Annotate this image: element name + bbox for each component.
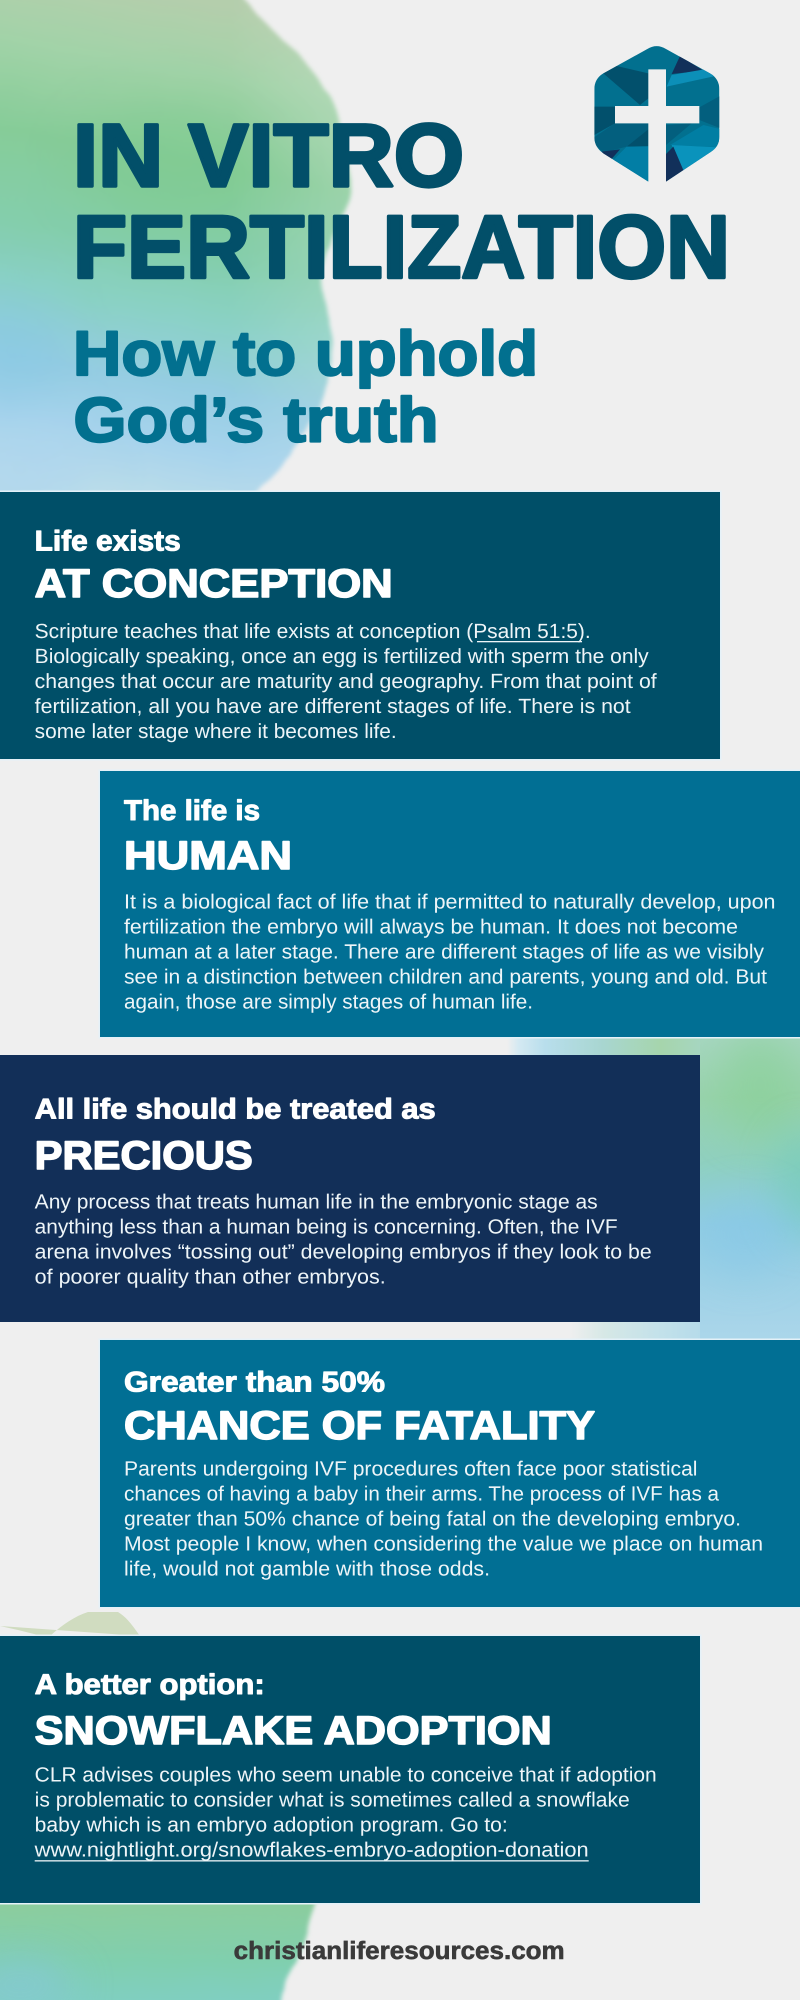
body text: see in a distinction between children and parents, young and old. But <box>124 966 767 989</box>
title <box>73 105 730 296</box>
heading: AT CONCEPTION <box>35 562 393 606</box>
body text <box>34 1764 657 1862</box>
watercolor wash: right middle <box>507 1030 800 1340</box>
body text: CLR advises couples who seem unable to conceive that if adoption <box>35 1764 657 1787</box>
body text: Parents undergoing IVF procedures often face poor statistical <box>124 1458 698 1481</box>
kicker: A better option: <box>35 1669 265 1701</box>
heading: CHANCE OF FATALITY <box>124 1404 595 1448</box>
watercolor wash: bottom left <box>0 1890 318 2000</box>
panel: human <box>100 771 800 1037</box>
panel: chance of fatality <box>100 1340 800 1607</box>
body text: is problematic to consider what is sometimes called a snowflake <box>35 1789 630 1812</box>
subtitle: God’s truth <box>74 386 439 456</box>
body text: changes that occur are maturity and geography. From that point of <box>35 670 657 693</box>
panel: snowflake adoption <box>0 1636 700 1903</box>
body text <box>35 620 657 743</box>
panel: precious <box>0 1055 700 1322</box>
body text: Biologically speaking, once an egg is fertilized with sperm the only <box>35 645 649 668</box>
heading: PRECIOUS <box>35 1134 253 1178</box>
subtitle <box>73 319 538 456</box>
heading: HUMAN <box>124 834 292 878</box>
body text <box>35 1191 652 1289</box>
title: IN VITRO <box>73 105 464 205</box>
body text: life, would not gamble with those odds. <box>124 1558 490 1581</box>
body text: www.nightlight.org/snowflakes-embryo-adoption-donation <box>34 1839 589 1862</box>
title: FERTILIZATION <box>73 196 730 296</box>
subtitle: How to uphold <box>73 319 538 389</box>
footer website: christianliferesources.com <box>234 1937 565 1965</box>
body text <box>124 1458 763 1581</box>
body text: anything less than a human being is concerning. Often, the IVF <box>35 1216 618 1239</box>
body text: some later stage where it becomes life. <box>35 720 397 743</box>
body text: Scripture teaches that life exists at conception (Psalm 51:5). <box>35 620 591 643</box>
body text: again, those are simply stages of human life. <box>124 991 533 1014</box>
panel: at conception <box>0 492 720 759</box>
kicker: The life is <box>124 795 260 827</box>
body text: greater than 50% chance of being fatal on the developing embryo. <box>124 1508 741 1531</box>
body text: baby which is an embryo adoption program. Go to: <box>35 1814 508 1837</box>
kicker: All life should be treated as <box>35 1094 436 1126</box>
body text <box>124 891 776 1014</box>
logo: faceted hexagon with cross <box>594 46 720 182</box>
body text: Any process that treats human life in the embryonic stage as <box>35 1191 598 1214</box>
body text: human at a later stage. There are different stages of life as we visibly <box>124 941 765 964</box>
body text: fertilization the embryo will always be human. It does not become <box>124 916 738 939</box>
body text: It is a biological fact of life that if permitted to naturally develop, upon <box>124 891 776 914</box>
body text: of poorer quality than other embryos. <box>35 1266 386 1289</box>
logo cross <box>615 69 699 183</box>
kicker: Greater than 50% <box>124 1366 385 1398</box>
body text: Most people I know, when considering the value we place on human <box>124 1533 763 1556</box>
heading: SNOWFLAKE ADOPTION <box>35 1709 552 1753</box>
body text: fertilization, all you have are different stages of life. There is not <box>35 695 631 718</box>
watercolor wash: top left <box>0 0 354 490</box>
kicker: Life exists <box>35 526 181 558</box>
body text: arena involves “tossing out” developing embryos if they look to be <box>35 1241 652 1264</box>
body text: chances of having a baby in their arms. The process of IVF has a <box>124 1483 720 1506</box>
watercolor wash: small peak above last panel <box>0 1612 140 1636</box>
